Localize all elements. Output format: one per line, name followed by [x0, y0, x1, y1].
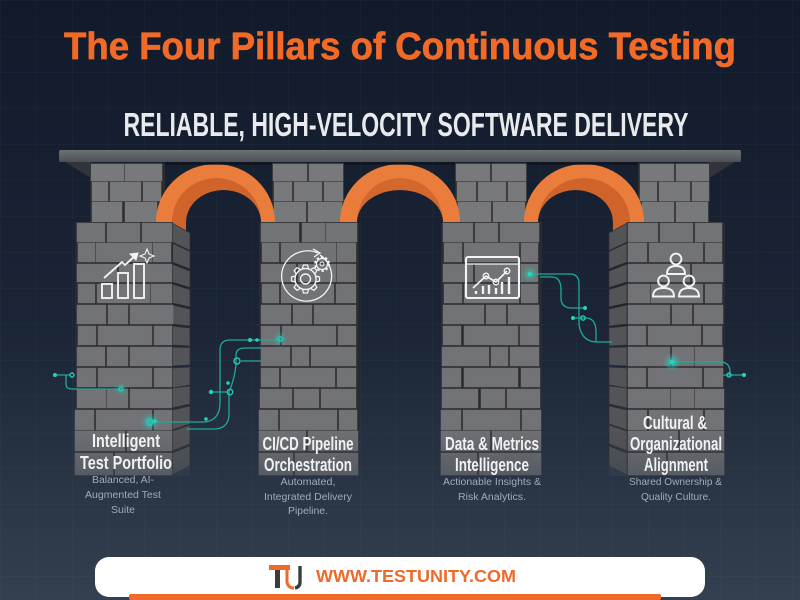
circuit lines: left — [53, 373, 125, 393]
website url: WWW.TESTUNITY.COM — [316, 566, 516, 586]
label: pillar 2: Orchestration — [264, 455, 352, 475]
pillar 4 — [609, 222, 725, 476]
label: pillar 2 — [262, 434, 354, 517]
pillar 1 — [75, 222, 190, 476]
icon: gears cycle — [282, 249, 332, 301]
upper brick columns — [90, 163, 709, 223]
label: pillar 3: Risk Analytics. — [458, 491, 526, 503]
title: The Four Pillars of Continuous Testing — [64, 26, 736, 68]
upper column 2 — [272, 163, 344, 223]
footer bar — [95, 557, 705, 600]
circuit lines: centre — [144, 334, 285, 429]
footer accent — [129, 594, 661, 600]
label: pillar 4: Quality Culture. — [641, 491, 711, 503]
pillar 3 — [441, 222, 542, 476]
arch 2 — [340, 164, 460, 224]
label: pillar 3: Data & Metrics — [445, 434, 539, 454]
icon: growth chart — [102, 249, 154, 298]
arch 1 — [156, 164, 275, 232]
upper column 1 — [90, 163, 165, 223]
label: pillar 4: Shared Ownership & — [629, 476, 722, 488]
label: pillar 3: Intelligence — [455, 455, 529, 475]
beam — [59, 150, 741, 178]
label: pillar 1: Test Portfolio — [80, 453, 172, 473]
logo — [269, 565, 300, 588]
label: pillar 3: Actionable Insights & — [443, 476, 541, 488]
arch 3 — [524, 164, 644, 232]
upper column 4 — [638, 163, 709, 223]
label: pillar 1 — [80, 431, 172, 516]
front face — [75, 222, 173, 476]
label: pillar 1: Augmented Test — [85, 489, 161, 501]
front face — [627, 222, 725, 476]
circuit lines: far right — [666, 356, 746, 377]
pillar base fade — [75, 425, 725, 476]
arches — [156, 164, 644, 232]
label: pillar 1: Intelligent — [92, 431, 160, 451]
label: pillar 2: CI/CD Pipeline — [262, 434, 354, 454]
label: pillar 1: Suite — [111, 504, 135, 516]
side face — [172, 223, 190, 475]
label: pillar 4 — [629, 413, 722, 503]
pillar 2 — [259, 222, 359, 476]
label: pillar 2: Pipeline. — [288, 505, 328, 517]
label: pillar 4: Alignment — [644, 455, 708, 475]
label: pillar 3 — [443, 434, 541, 503]
icon: team — [653, 254, 699, 296]
label: pillar 2: Integrated Delivery — [264, 491, 353, 503]
label: pillar 4: Organizational — [630, 434, 722, 454]
icon: dashboard — [466, 257, 519, 298]
label: pillar 2: Automated, — [280, 476, 336, 488]
upper column 3 — [455, 163, 527, 223]
side face — [609, 223, 627, 475]
label: pillar 4: Cultural & — [643, 413, 707, 433]
circuit lines: right — [525, 269, 612, 342]
label: pillar 1: Balanced, AI- — [92, 474, 154, 486]
